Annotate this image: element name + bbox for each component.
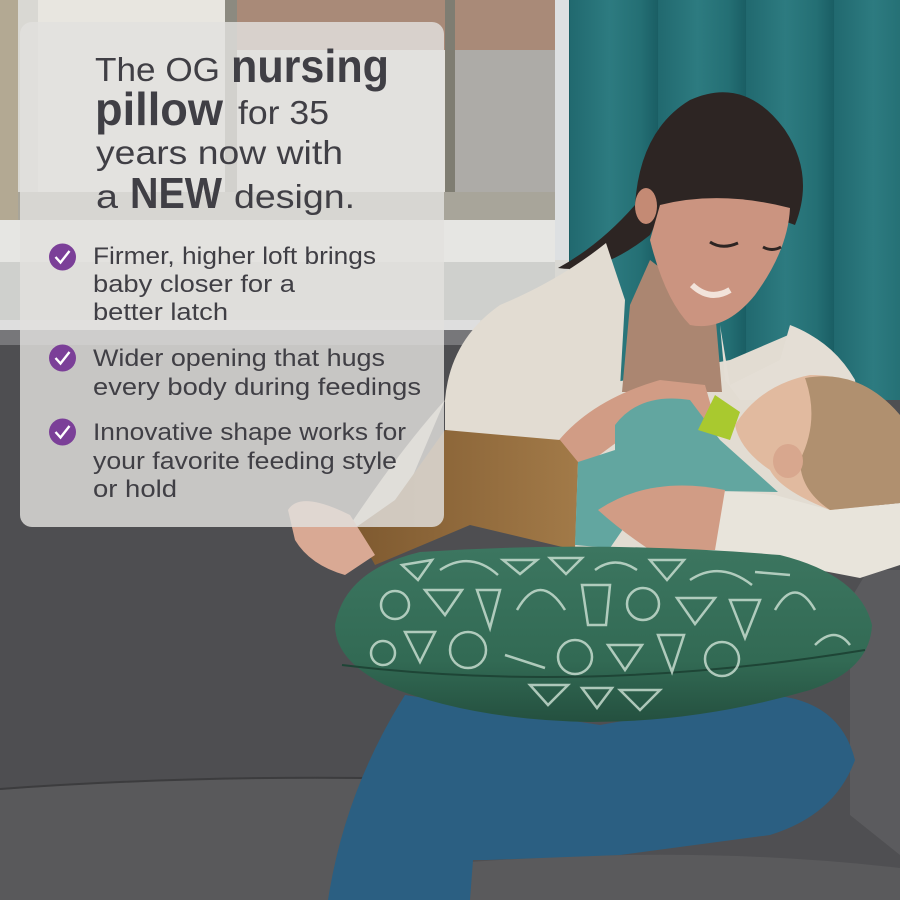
headline <box>95 40 389 218</box>
headline: pillow <box>95 83 223 135</box>
smile <box>692 285 730 295</box>
blouse left side <box>445 243 625 455</box>
hair and ponytail <box>558 92 803 269</box>
headline: nursing <box>231 40 389 92</box>
bullet 1 <box>49 243 376 326</box>
bullet 3: Innovative shape works for <box>93 419 406 446</box>
curtain <box>569 0 900 400</box>
baby <box>288 375 900 575</box>
hand on baby <box>598 486 725 550</box>
headline: The OG <box>95 51 220 88</box>
bullet 1: baby closer for a <box>93 271 296 298</box>
bullet 1: Firmer, higher loft brings <box>93 243 376 270</box>
headline: design. <box>234 178 355 215</box>
trousers <box>355 430 578 565</box>
nursing pillow <box>335 547 872 722</box>
sweater <box>575 398 778 548</box>
jeans <box>328 695 855 900</box>
feet <box>288 501 375 575</box>
translucent text panel <box>20 22 444 527</box>
neck and chest <box>622 260 722 392</box>
woman <box>350 92 900 578</box>
bottle <box>698 395 740 440</box>
bullet 2: Wider opening that hugs <box>93 345 385 372</box>
baby ear <box>773 444 803 478</box>
headline: NEW <box>130 169 222 218</box>
ear <box>635 188 657 224</box>
bullet 1: better latch <box>93 299 228 326</box>
face <box>650 198 790 326</box>
headline: a <box>96 178 119 215</box>
head <box>735 375 900 510</box>
sleeve <box>715 490 900 578</box>
collar right <box>720 325 855 400</box>
bullet 2 <box>49 344 421 401</box>
icon: purple check <box>49 418 76 446</box>
pillow animal print <box>371 558 850 710</box>
arm supporting baby <box>555 380 715 462</box>
icon: purple check <box>49 244 76 270</box>
bullet 2: every body during feedings <box>93 374 421 401</box>
bullet 3: or hold <box>93 476 177 503</box>
hair <box>800 376 900 510</box>
icon: purple check <box>49 344 76 372</box>
headline: for 35 <box>238 94 329 131</box>
bullet 3 <box>49 418 406 503</box>
bullet 3: your favorite feeding style <box>93 448 397 475</box>
headline: years now with <box>96 134 343 171</box>
sofa <box>0 345 900 900</box>
eyes <box>710 242 781 250</box>
torso base of blouse <box>500 330 880 560</box>
